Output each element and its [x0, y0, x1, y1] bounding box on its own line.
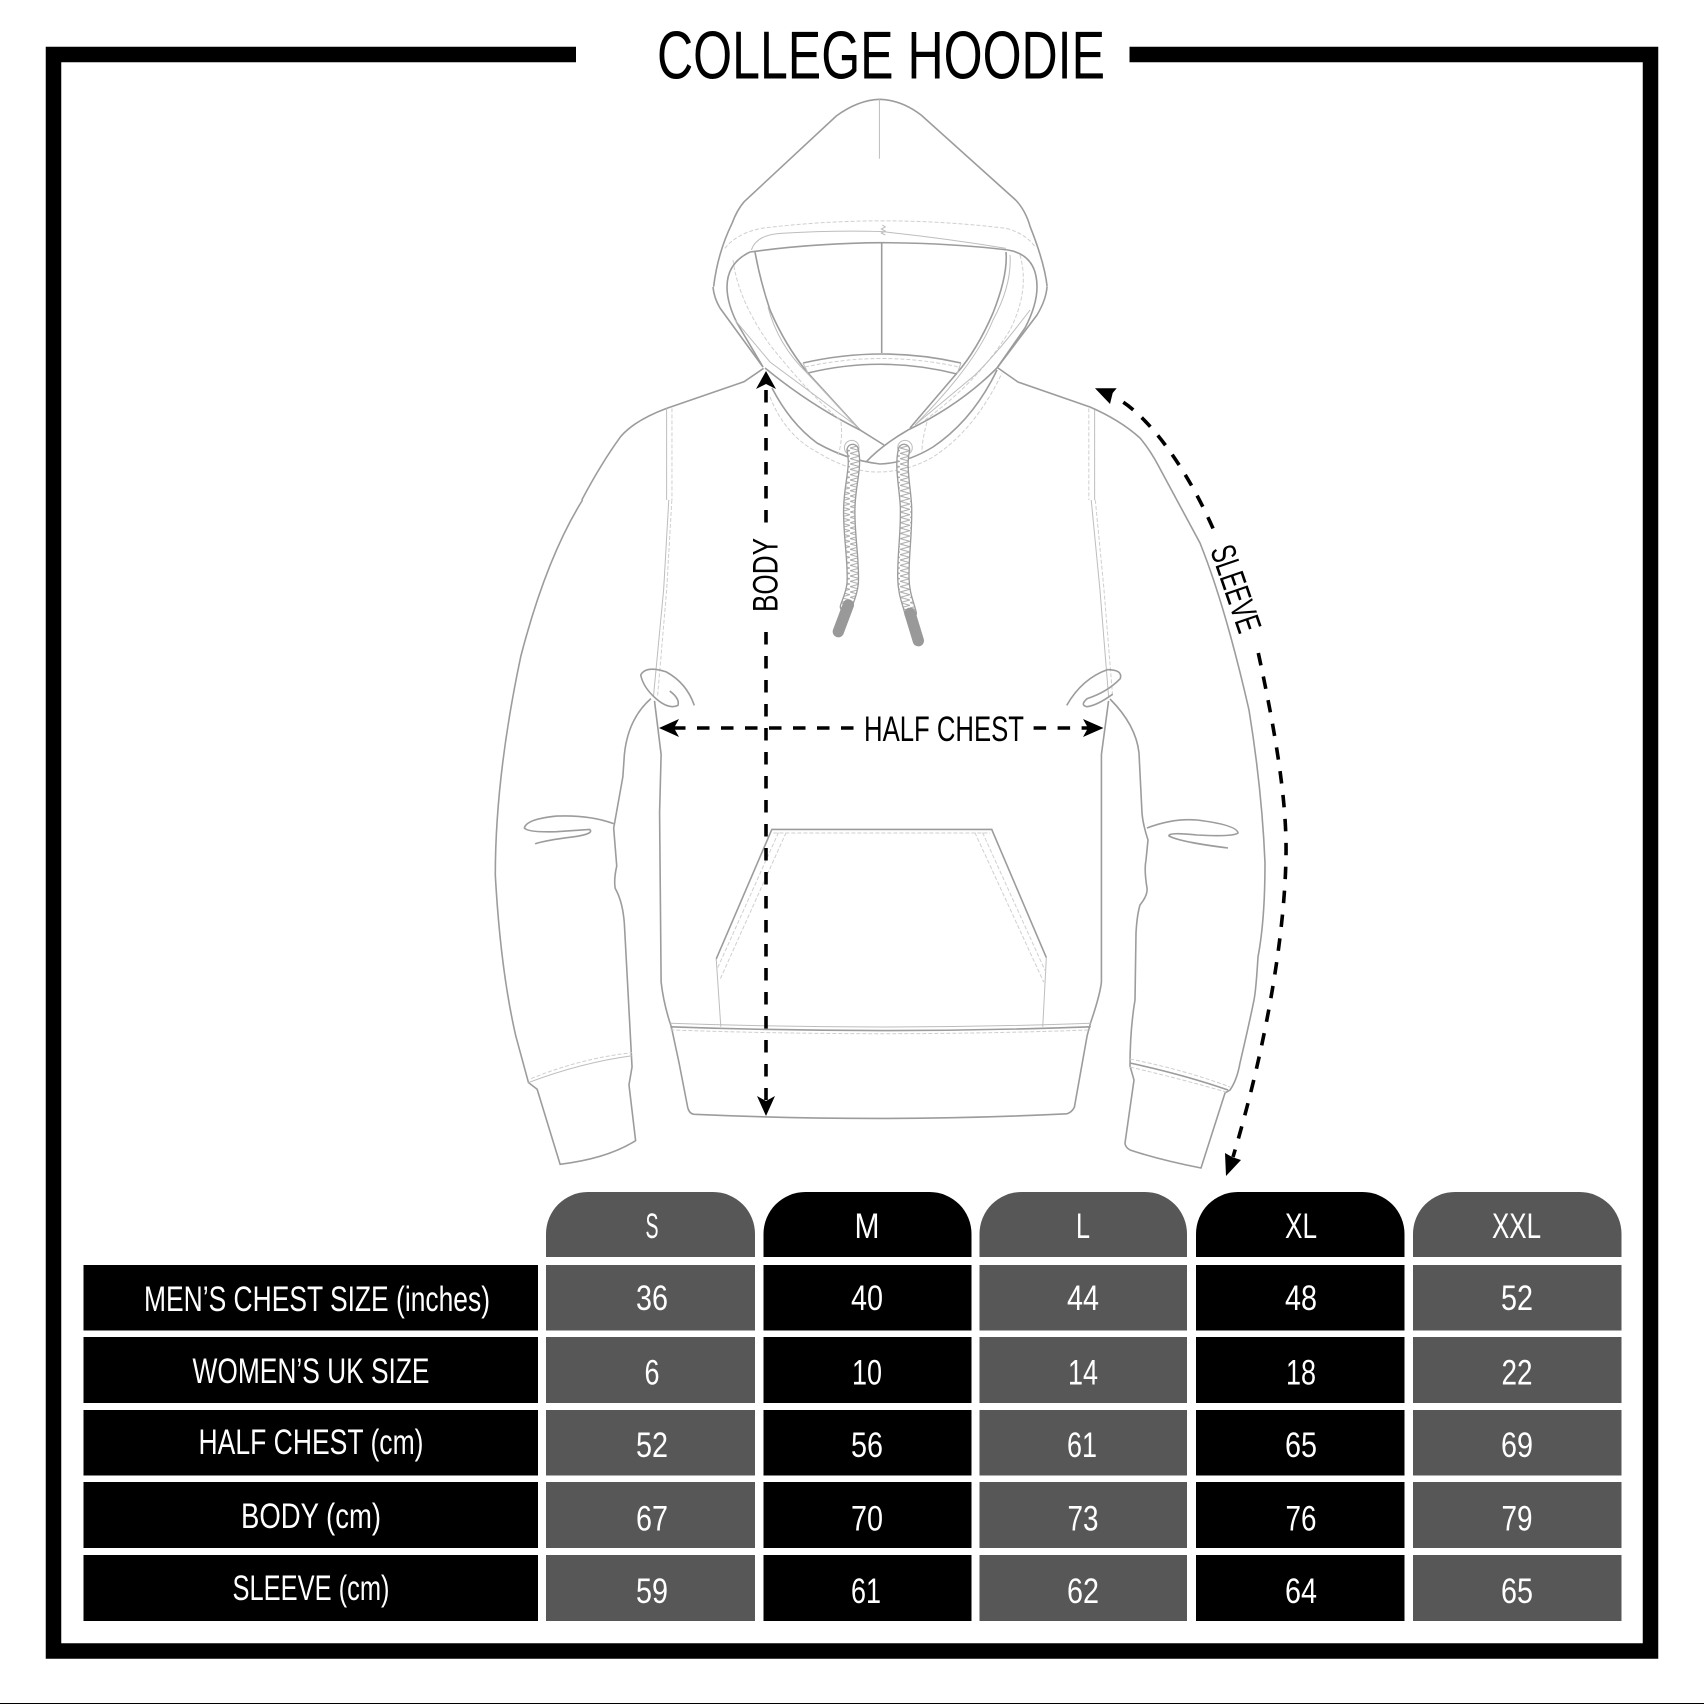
cell L [980, 1410, 1187, 1476]
cell L [980, 1482, 1187, 1548]
cell XL: 76 [1286, 1500, 1316, 1538]
cell XXL: 69 [1501, 1426, 1533, 1465]
hoodie technical drawing [495, 99, 1265, 1168]
cell S [546, 1410, 755, 1476]
header: XL [1196, 1192, 1404, 1257]
right shoulder and sleeve outline [998, 368, 1265, 1168]
cell M [764, 1482, 972, 1548]
cell M [764, 1337, 972, 1403]
cell S: 52 [636, 1426, 668, 1465]
cell L [980, 1555, 1187, 1621]
cell XXL [1413, 1555, 1622, 1621]
cell S: 67 [636, 1500, 668, 1538]
lower body, left sleeve and pocket [495, 500, 1121, 1164]
cell XL [1196, 1265, 1404, 1330]
row label: SLEEVE (cm) [232, 1569, 390, 1608]
title: COLLEGE HOODIE [657, 18, 1105, 94]
cell L: 44 [1067, 1279, 1099, 1318]
cell XL: 65 [1285, 1426, 1317, 1465]
hem seam [670, 1027, 1091, 1031]
header: S [546, 1192, 755, 1257]
header: M: M [854, 1207, 880, 1246]
cell L: 61 [1067, 1426, 1097, 1465]
row label: WOMEN’S UK SIZE [192, 1352, 430, 1391]
arrow: body length [756, 371, 776, 1116]
row label [84, 1265, 538, 1330]
arrow: half chest [659, 719, 1104, 737]
left elbow fold [524, 816, 614, 844]
row label [84, 1410, 538, 1476]
row label: HALF CHEST (cm) [198, 1423, 424, 1462]
row label [84, 1555, 538, 1621]
cell S: 6 [644, 1354, 660, 1392]
header: XXL: XXL [1492, 1207, 1541, 1246]
left cuff seam [528, 1056, 632, 1083]
cell XXL: 65 [1501, 1572, 1533, 1611]
body sides and hem [654, 701, 1109, 1118]
header: L: L [1076, 1207, 1090, 1246]
row: sleeve [84, 1555, 1622, 1621]
cell XXL [1413, 1410, 1622, 1476]
cell XXL: 22 [1502, 1354, 1532, 1392]
header: S: S [646, 1207, 658, 1246]
cell XL [1196, 1337, 1404, 1403]
cell XL [1196, 1555, 1404, 1621]
right elbow fold [1147, 820, 1238, 848]
cell M: 56 [851, 1426, 883, 1465]
row: women's UK size [84, 1337, 1622, 1403]
cell S: 36 [636, 1279, 668, 1318]
cell XL [1196, 1482, 1404, 1548]
header: XXL [1413, 1192, 1622, 1257]
label: BODY: BODY [746, 538, 786, 612]
cell M [764, 1265, 972, 1330]
cell XXL: 52 [1501, 1279, 1533, 1318]
kangaroo pocket [716, 829, 1046, 959]
cell L: 62 [1067, 1572, 1099, 1611]
cell XXL [1413, 1337, 1622, 1403]
cell L: 14 [1068, 1354, 1098, 1392]
cell XL [1196, 1410, 1404, 1476]
row: body [84, 1482, 1622, 1548]
row: men's chest size [84, 1265, 1622, 1330]
cell L [980, 1337, 1187, 1403]
cell XXL: 79 [1502, 1500, 1532, 1538]
cell S [546, 1265, 755, 1330]
cell XXL [1413, 1265, 1622, 1330]
cell M [764, 1410, 972, 1476]
row label [84, 1337, 538, 1403]
header: XL: XL [1285, 1207, 1317, 1246]
row label [84, 1482, 538, 1548]
cell M: 10 [852, 1354, 882, 1392]
cell S [546, 1337, 755, 1403]
drawstrings [838, 450, 918, 641]
cell XL: 18 [1286, 1354, 1316, 1392]
cell M: 40 [851, 1279, 883, 1318]
left sleeve [495, 500, 651, 1164]
cell S [546, 1482, 755, 1548]
cell L: 73 [1068, 1500, 1098, 1538]
armpit folds [641, 669, 694, 707]
label: HALF CHEST: HALF CHEST [864, 710, 1024, 749]
hood opening, lapels, collar and right sleeve [713, 243, 1265, 1168]
hood crown and left shoulder [582, 99, 1095, 500]
cell XL: 64 [1285, 1572, 1317, 1611]
cell XXL [1413, 1482, 1622, 1548]
cell XL: 48 [1285, 1279, 1317, 1318]
cell S [546, 1555, 755, 1621]
row: half chest [84, 1410, 1622, 1476]
row label: BODY (cm) [241, 1497, 381, 1536]
size table [84, 1192, 1622, 1621]
header: L [980, 1192, 1187, 1257]
cell S: 59 [636, 1572, 668, 1611]
cell M: 61 [851, 1572, 881, 1611]
cell M: 70 [851, 1500, 883, 1538]
cell L [980, 1265, 1187, 1330]
cell M [764, 1555, 972, 1621]
row label: MEN’S CHEST SIZE (inches) [144, 1280, 490, 1319]
header: M [764, 1192, 972, 1257]
right cuff seam [1130, 1063, 1228, 1090]
label: SLEEVE: SLEEVE [1202, 540, 1269, 638]
arrow: sleeve length [1095, 388, 1286, 1176]
